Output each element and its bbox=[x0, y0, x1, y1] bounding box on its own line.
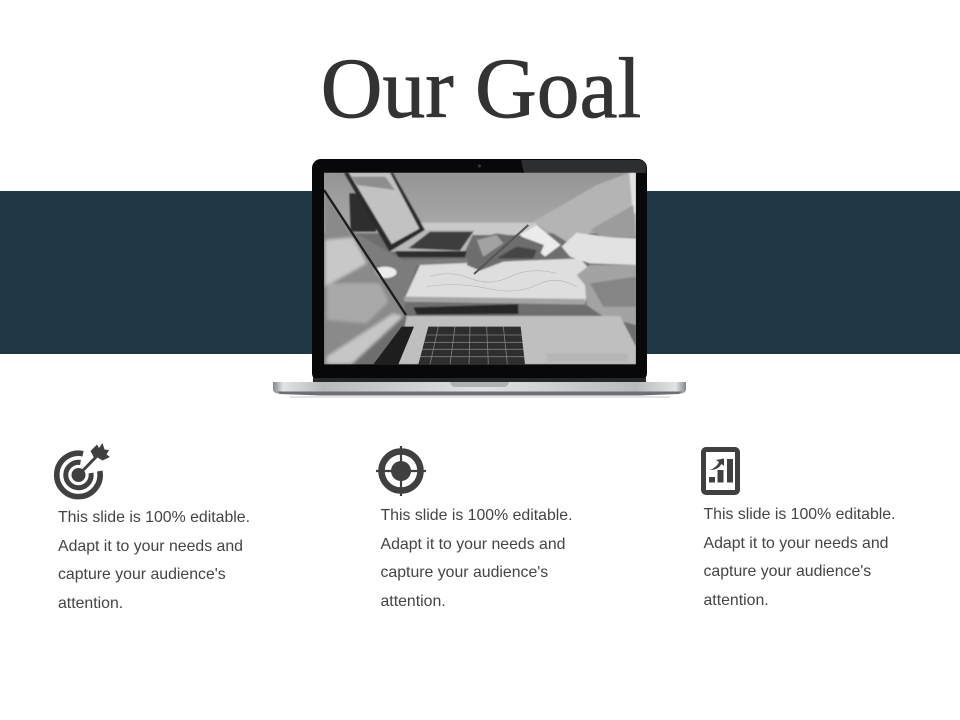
text block: column 3: capture your audience's bbox=[704, 563, 871, 580]
text block: column 2: attention. bbox=[380, 592, 446, 610]
back laptop lid bbox=[344, 173, 425, 252]
table bbox=[324, 233, 636, 364]
dark band bbox=[0, 191, 960, 354]
text block: column 1 bbox=[58, 509, 250, 612]
icon: chart report bbox=[701, 447, 740, 495]
front laptop keyboard deck bbox=[398, 316, 636, 364]
laptop body bbox=[312, 159, 647, 382]
base shadow bbox=[290, 396, 670, 398]
title: Our Goal bbox=[321, 42, 641, 136]
bottom bezel strip bbox=[313, 378, 646, 382]
hand with pen bbox=[467, 233, 544, 271]
text block: column 1: This slide is 100% editable. bbox=[58, 509, 250, 526]
left dark object bbox=[349, 193, 376, 232]
paper bbox=[404, 258, 592, 303]
front laptop edge bbox=[324, 190, 406, 315]
mouse bbox=[373, 267, 397, 278]
text block: column 2: Adapt it to your needs and bbox=[380, 536, 565, 552]
pencil bbox=[474, 225, 528, 274]
text block: column 3 bbox=[704, 506, 896, 608]
text block: column 2 bbox=[380, 507, 572, 610]
front laptop hinge shadow bbox=[373, 327, 414, 364]
right shirt bbox=[562, 233, 636, 265]
paper scribbles bbox=[427, 271, 577, 291]
shirt cuff bbox=[520, 225, 561, 257]
camera bbox=[478, 164, 481, 168]
photo on screen bbox=[324, 173, 636, 364]
back laptop deck bbox=[390, 230, 475, 252]
front laptop screen bbox=[324, 190, 405, 364]
sleeve upper right bbox=[533, 173, 636, 242]
right hand bbox=[577, 265, 636, 325]
text block: column 3: attention. bbox=[704, 592, 769, 608]
text block: column 2: This slide is 100% editable. bbox=[380, 507, 572, 524]
text block: column 3: Adapt it to your needs and bbox=[704, 534, 888, 552]
text block: column 3: This slide is 100% editable. bbox=[704, 506, 896, 523]
text block: column 1: Adapt it to your needs and bbox=[58, 538, 243, 554]
laptop illustration bbox=[273, 159, 686, 398]
text block: column 1: capture your audience's bbox=[58, 566, 226, 583]
text block: column 2: capture your audience's bbox=[380, 564, 548, 581]
notch bbox=[450, 382, 509, 387]
keyboard bbox=[418, 327, 525, 364]
icon: crosshair bbox=[376, 446, 426, 496]
lid glare bbox=[521, 160, 646, 173]
pens bbox=[413, 304, 518, 315]
laptop base bbox=[273, 382, 686, 395]
text block: column 1: attention. bbox=[58, 594, 123, 612]
icon: target with arrow bbox=[54, 443, 110, 500]
